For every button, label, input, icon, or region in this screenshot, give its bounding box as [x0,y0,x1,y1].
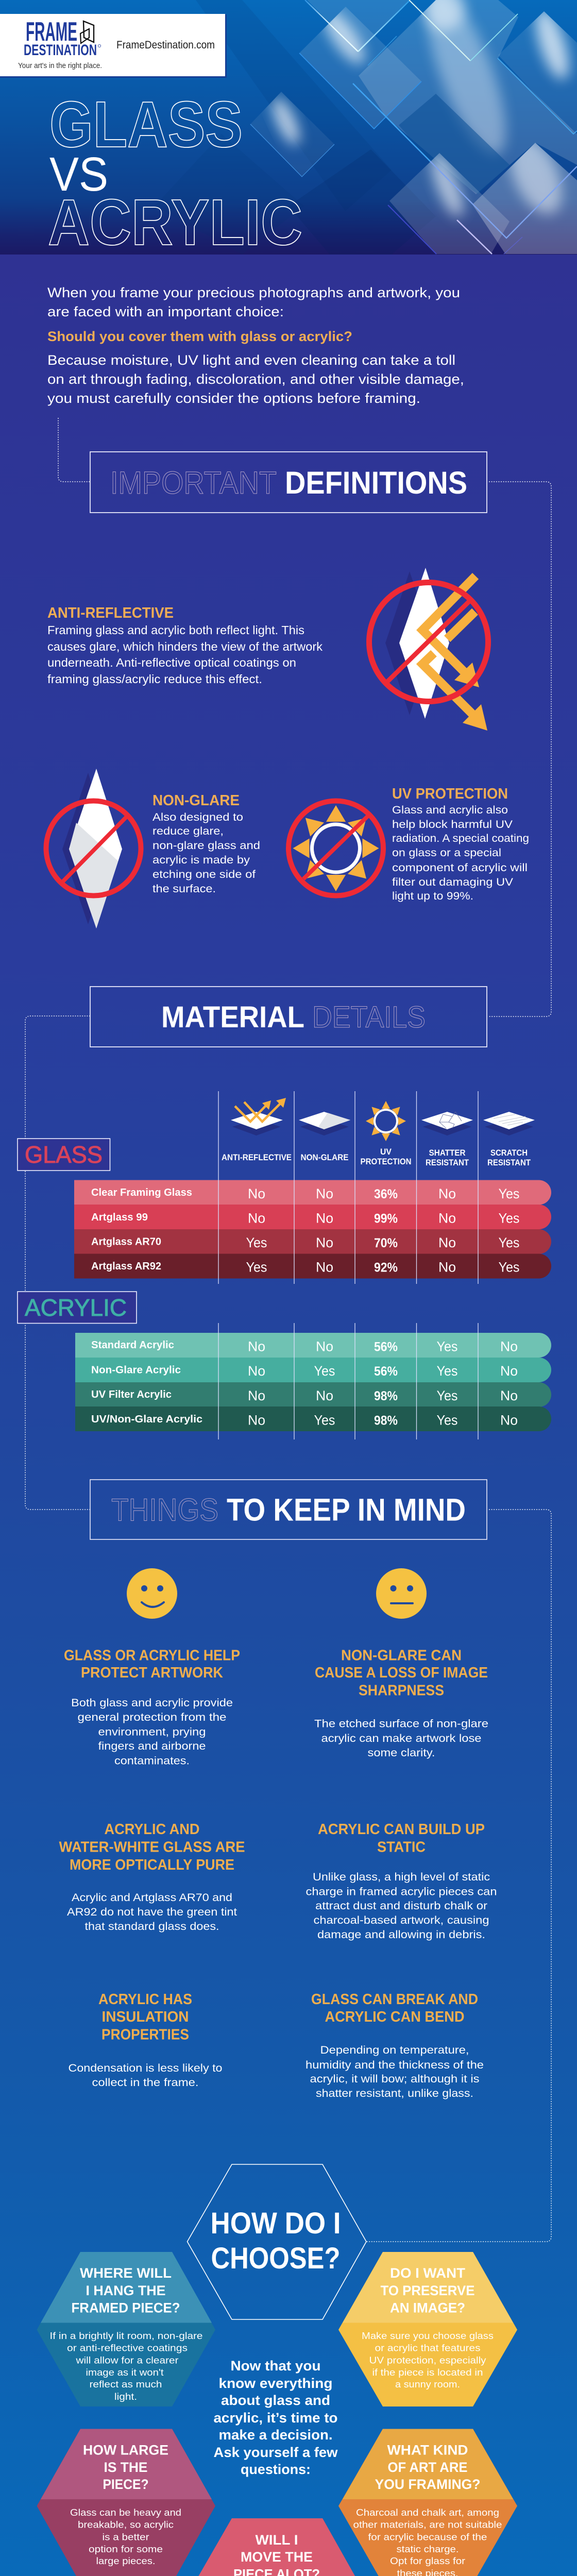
table column headers: SCRATCH [490,1148,528,1158]
table column headers: ANTI-REFLECTIVE [222,1153,292,1162]
tip: acrylic can build up static: STATIC [377,1839,426,1856]
dotted connector: material details [25,1016,551,2242]
tip: acrylic and water-white glass [59,1821,245,1933]
row: uv filter acrylic: No [316,1388,333,1403]
hexagon: what kind of art: other materials, are not suitable [353,2519,502,2530]
hexagon: will i move the piece: MOVE THE [241,2549,313,2565]
heading: material details: MATERIAL [161,1001,304,1034]
tip: acrylic and water-white glass: WATER-WHITE GLASS ARE [59,1839,245,1856]
row: uv filter acrylic: Yes [437,1388,457,1403]
row: artglass 99: No [316,1211,333,1226]
row: artglass ar92: 92% [374,1260,398,1275]
row: uv/non-glare acrylic: No [248,1413,265,1428]
hexagon: how large is the piece: IS THE [104,2460,147,2475]
hexagon: how large is the piece: breakable, so acrylic [78,2519,174,2530]
row: artglass 99: No [248,1211,265,1226]
title: ACRYLIC [48,186,302,259]
row: clear framing glass: No [316,1186,333,1201]
text: uv protection: filter out damaging UV [392,876,513,888]
row: artglass ar92 [74,1254,551,1279]
tip: glass or acrylic help protect artwork: PROTECT ARTWORK [81,1665,223,1681]
dotted connector: definitions [58,418,551,1016]
tip: acrylic and water-white glass: that standard glass does. [84,1921,219,1933]
row: clear framing glass: Yes [499,1186,519,1201]
table column headers [222,1147,531,1167]
tip: glass can break and acrylic can bend: acrylic, it will bow; although it is [310,2073,479,2085]
text: uv protection: on glass or a special [392,847,501,859]
intro text: you must carefully consider the options before framing. [47,391,420,406]
hexagon: do i want to preserve: if the piece is located in [372,2367,483,2378]
row: artglass ar70: Artglass AR70 [91,1236,161,1248]
hexagon: do i want to preserve [338,2252,517,2406]
icon: smiling face [127,1568,177,1619]
row: standard acrylic: No [500,1338,518,1354]
tip: acrylic can build up static: charge in framed acrylic pieces can [306,1886,497,1898]
row: artglass ar70: Yes [499,1235,519,1250]
tip: glass can break and acrylic can bend: Depending on temperature, [320,2044,469,2056]
hexagon: what kind of art: WHAT KIND [387,2442,468,2458]
row: non-glare acrylic: No [248,1363,265,1379]
title: VS [49,147,108,201]
title: GLASS [49,88,243,161]
text: anti-reflective [47,605,323,686]
text: uv protection: help block harmful UV [392,819,513,831]
tip: acrylic can build up static: Unlike glass, a high level of static [313,1871,490,1883]
tip: acrylic can build up static: attract dust and disturb chalk or [315,1900,487,1912]
tip: acrylic has insulation properties: ACRYLIC HAS [98,1991,192,2008]
text: ask yourself questions: Now that you [231,2358,320,2374]
row: non-glare acrylic: No [500,1363,518,1379]
row: clear framing glass: Clear Framing Glass [91,1187,192,1198]
row: uv/non-glare acrylic: Yes [314,1413,335,1428]
intro text: on art through fading, discoloration, and other visible damage, [47,371,464,387]
row: uv/non-glare acrylic: Yes [437,1413,457,1428]
row: non-glare acrylic: Yes [314,1363,335,1379]
text: uv protection: UV PROTECTION [392,786,508,802]
intro text [47,285,464,406]
tip: acrylic can build up static: charcoal-based artwork, causing [313,1914,489,1926]
text: ask yourself questions: Ask yourself a few [213,2445,338,2460]
row: artglass ar70 [74,1229,551,1254]
row: standard acrylic: No [248,1338,265,1354]
row: artglass 99: Artglass 99 [91,1212,148,1223]
hexagon: how large is the piece: HOW LARGE [83,2442,168,2458]
hexagon: do i want to preserve: DO I WANT [390,2265,466,2281]
text: uv protection: light up to 99%. [392,890,473,902]
header logo box [0,14,227,78]
text: non-glare: acrylic is made by [152,854,250,866]
row: non-glare acrylic [75,1358,551,1382]
icon: neutral face [376,1568,427,1619]
tip: glass or acrylic help protect artwork: GLASS OR ACRYLIC HELP [64,1648,240,1664]
hexagon: how do i choose [188,2164,366,2319]
hexagon: do i want to preserve: Make sure you choose glass [362,2331,494,2341]
hexagon: where will i hang: image as it won't [86,2367,164,2378]
tip: non-glare can cause a loss of image sharpness: acrylic can make artwork lose [321,1733,481,1744]
intro text: Because moisture, UV light and even cleaning can take a toll [47,352,455,368]
text: non-glare: non-glare glass and [152,840,260,852]
hexagon: where will i hang: I HANG THE [86,2283,166,2298]
hero banner [0,0,577,255]
row: non-glare acrylic: 56% [374,1364,398,1379]
row: standard acrylic: No [316,1338,333,1354]
hexagon: do i want to preserve: AN IMAGE? [390,2300,465,2315]
tip: glass or acrylic help protect artwork [64,1648,240,1767]
text: anti-reflective: ANTI-REFLECTIVE [47,605,174,621]
tip: non-glare can cause a loss of image sharpness: NON-GLARE CAN [341,1648,462,1664]
hexagon: how large is the piece: is a better [102,2532,149,2542]
tip: glass can break and acrylic can bend [306,1991,484,2099]
title [48,88,302,259]
hexagon: do i want to preserve: a sunny room. [395,2379,460,2389]
hexagon: how large is the piece: large pieces. [96,2556,156,2566]
row: non-glare acrylic: Yes [437,1363,457,1379]
icon: shatter plate [421,1112,473,1136]
text: uv protection [392,786,529,902]
tip: glass or acrylic help protect artwork: environment, prying [98,1726,206,1738]
tip: non-glare can cause a loss of image sharpness: SHARPNESS [359,1683,444,1699]
tip: glass can break and acrylic can bend: humidity and the thickness of the [306,2059,484,2071]
text: non-glare [152,792,260,895]
hexagon: where will i hang: light. [114,2392,137,2402]
hexagon: what kind of art: static charge. [397,2544,459,2554]
row: uv filter acrylic: UV Filter Acrylic [91,1389,172,1400]
text: non-glare: NON-GLARE [152,792,240,809]
tip: glass can break and acrylic can bend: ACRYLIC CAN BEND [325,2009,465,2025]
heading: important definitions: DEFINITIONS [285,465,467,500]
table column headers: RESISTANT [487,1158,531,1167]
row: artglass 99 [74,1205,551,1229]
row: clear framing glass [74,1180,551,1205]
label: glass: GLASS [25,1141,103,1168]
row: artglass ar70: Yes [246,1235,267,1250]
text: non-glare: Also designed to [152,811,243,823]
hexagon: what kind of art: OF ART ARE [387,2460,468,2475]
row: standard acrylic: Yes [437,1338,457,1354]
text: anti-reflective: Framing glass and acrylic both reflect light. This [47,623,304,637]
table column headers: PROTECTION [361,1157,411,1166]
icon: non-glare prohibited [46,769,141,928]
hexagon: how large is the piece [37,2429,215,2576]
website: FrameDestination.com [116,39,215,51]
row: uv/non-glare acrylic: UV/Non-Glare Acrylic [91,1414,202,1425]
row: uv filter acrylic [75,1382,551,1407]
table column headers: UV [380,1147,392,1157]
row: artglass 99: Yes [499,1211,519,1226]
tip: acrylic can build up static: ACRYLIC CAN BUILD UP [318,1821,485,1838]
row: clear framing glass: 36% [374,1187,398,1201]
tip: glass or acrylic help protect artwork: contaminates. [114,1755,190,1767]
table column headers: RESISTANT [426,1158,469,1167]
intro text: Should you cover them with glass or acrylic? [47,329,352,344]
hexagon: where will i hang: or anti-reflective coatings [67,2343,188,2353]
intro text: are faced with an important choice: [47,304,284,319]
tip: glass can break and acrylic can bend: shatter resistant, unlike glass. [316,2088,473,2099]
heading: material details [90,987,487,1047]
text: ask yourself questions: make a decision. [218,2427,333,2443]
icon: scratch plate [483,1112,535,1136]
heading: things to keep in mind: TO KEEP IN MIND [227,1492,466,1527]
heading: important definitions: IMPORTANT [110,465,277,500]
text: uv protection: Glass and acrylic also [392,804,508,816]
hexagon: what kind of art: Charcoal and chalk art, among [356,2507,499,2518]
tip: non-glare can cause a loss of image sharpness: The etched surface of non-glare [314,1718,488,1730]
row: uv filter acrylic: No [500,1388,518,1403]
text: uv protection: radiation. A special coating [392,833,529,844]
tip: acrylic can build up static: damage and allowing in debris. [317,1929,485,1941]
table: acrylic rows [75,1333,551,1431]
table column icons [231,1098,535,1141]
row: uv filter acrylic: No [248,1388,265,1403]
logo wordmark: DESTINATION [24,42,97,59]
tip: acrylic and water-white glass: MORE OPTICALLY PURE [70,1857,234,1873]
hexagon: where will i hang: reflect as much [90,2379,162,2389]
tip: acrylic has insulation properties: Condensation is less likely to [68,2062,223,2074]
text: anti-reflective: causes glare, which hinders the view of the artwork [47,640,323,653]
row: artglass ar70: No [316,1235,333,1250]
hexagon: will i move the piece [188,2518,366,2576]
table: glass rows [74,1180,551,1279]
tip: glass can break and acrylic can bend: GLASS CAN BREAK AND [311,1991,478,2008]
hexagon: will i move the piece: WILL I [256,2532,298,2548]
text: ask yourself questions [213,2358,338,2477]
row: artglass ar92: No [438,1259,456,1275]
hexagon: do i want to preserve: or acrylic that features [375,2343,480,2353]
icon: non-glare plate [299,1112,350,1136]
row: artglass ar92: Yes [246,1259,267,1275]
row: uv filter acrylic: 98% [374,1389,398,1403]
hexagon: where will i hang [37,2252,215,2406]
icon: uv sun prohibited [288,801,383,895]
tip: glass or acrylic help protect artwork: Both glass and acrylic provide [71,1697,233,1709]
table column headers: SHATTER [429,1148,466,1158]
heading: material details: DETAILS [312,1001,426,1034]
row: artglass ar92: Artglass AR92 [91,1261,161,1272]
row: artglass ar70: 70% [374,1236,398,1250]
tip: non-glare can cause a loss of image sharpness: some clarity. [368,1747,435,1759]
heading: things to keep in mind [90,1480,487,1539]
text: uv protection: component of acrylic will [392,862,528,874]
hexagon: what kind of art: Opt for glass for [390,2556,465,2566]
hexagon: where will i hang: FRAMED PIECE? [71,2300,180,2315]
tip: acrylic and water-white glass: Acrylic and Artglass AR70 and [72,1892,232,1904]
hexagon: what kind of art: for acrylic because of the [368,2532,487,2542]
hexagon: how do i choose: HOW DO I [210,2207,341,2240]
hexagon: how large is the piece: PIECE? [103,2477,148,2492]
row: standard acrylic [75,1333,551,1358]
text: anti-reflective: framing glass/acrylic reduce this effect. [47,672,262,686]
row: uv/non-glare acrylic [75,1406,551,1431]
row: standard acrylic: Standard Acrylic [91,1340,174,1351]
tip: acrylic has insulation properties [68,1991,223,2089]
tip: acrylic has insulation properties: collect in the frame. [92,2077,199,2089]
hexagon: where will i hang: WHERE WILL [80,2265,172,2281]
table column headers: NON-GLARE [301,1153,348,1162]
text: non-glare: the surface. [152,883,216,895]
intro text: When you frame your precious photographs and artwork, you [47,285,460,300]
heading: important definitions [90,452,487,513]
row: artglass 99: No [438,1211,456,1226]
row: non-glare acrylic: Non-Glare Acrylic [91,1364,181,1376]
hexagon: do i want to preserve: TO PRESERVE [380,2283,475,2298]
hexagon: how large is the piece: Glass can be heavy and [70,2507,181,2518]
row: artglass ar92: Yes [499,1259,519,1275]
logo wordmark: FRAME [26,17,77,47]
tip: acrylic and water-white glass: ACRYLIC AND [104,1821,200,1838]
tip: non-glare can cause a loss of image sharpness: CAUSE A LOSS OF IMAGE [315,1665,488,1681]
hexagon: what kind of art [338,2429,517,2576]
tip: acrylic has insulation properties: PROPERTIES [101,2027,189,2043]
text: non-glare: etching one side of [152,869,256,880]
hexagon: how do i choose: CHOOSE? [211,2242,340,2275]
row: clear framing glass: No [248,1186,265,1201]
text: ask yourself questions: acrylic, it’s time to [213,2410,338,2426]
icon: uv sun [366,1101,406,1141]
text: non-glare: reduce glare, [152,825,224,837]
row: standard acrylic: 56% [374,1340,398,1354]
label: acrylic: ACRYLIC [25,1294,127,1321]
text: ask yourself questions: questions: [241,2462,311,2477]
row: clear framing glass: No [438,1186,456,1201]
text: ask yourself questions: know everything [218,2376,333,2391]
row: artglass 99: 99% [374,1212,398,1226]
hexagon: what kind of art: YOU FRAMING? [375,2477,480,2492]
logo wordmark [24,17,101,59]
tip: non-glare can cause a loss of image sharpness [314,1648,488,1759]
hexagon: where will i hang: If in a brightly lit room, non-glare [49,2331,203,2341]
icon: anti-reflective prohibited [369,568,488,731]
hexagon: where will i hang: will allow for a clearer [75,2355,178,2366]
tip: acrylic can build up static [306,1821,497,1941]
tip: glass or acrylic help protect artwork: fingers and airborne [98,1740,206,1752]
tagline: Your art's in the right place. [18,61,102,70]
row: artglass ar70: No [438,1235,456,1250]
heading: things to keep in mind: THINGS [111,1492,218,1527]
row: uv/non-glare acrylic: 98% [374,1414,398,1428]
row: artglass ar92: No [316,1259,333,1275]
tip: glass or acrylic help protect artwork: general protection from the [77,1711,227,1723]
text: anti-reflective: underneath. Anti-reflective optical coatings on [47,656,296,669]
tip: acrylic and water-white glass: AR92 do not have the green tint [67,1906,237,1918]
tip: acrylic has insulation properties: INSULATION [102,2009,189,2025]
text: ask yourself questions: about glass and [221,2393,330,2408]
hexagon: do i want to preserve: UV protection, especially [369,2355,486,2366]
hexagon: how large is the piece: option for some [89,2544,163,2554]
row: uv/non-glare acrylic: No [500,1413,518,1428]
icon: anti-reflective plate [231,1098,286,1136]
